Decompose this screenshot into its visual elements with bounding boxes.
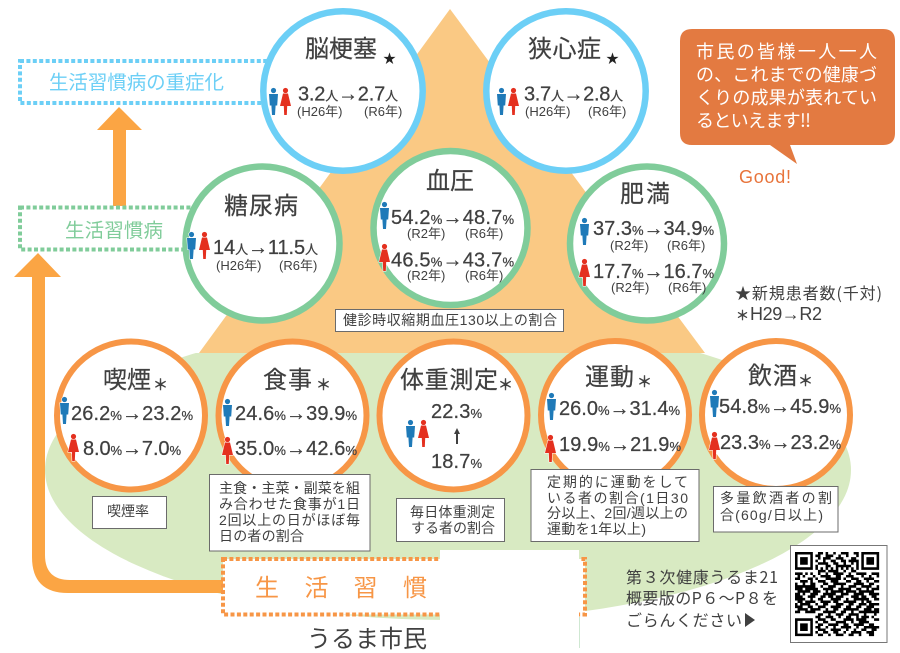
values: 14人→11.5人: [213, 237, 318, 259]
box: severe lifestyle disease: [20, 61, 270, 103]
note: diet definition: [210, 474, 370, 551]
note: exercise definition: いる者の割合(1日30: [547, 490, 688, 506]
values: men: 26.2%→23.2%: [71, 403, 193, 425]
values: 3.7人→2.8人: [524, 84, 623, 106]
icon: man: [710, 390, 719, 417]
years: men: (R6年): [667, 238, 705, 253]
note: smoking rate: 喫煙率: [107, 503, 149, 519]
asterisk: ＊: [798, 370, 813, 391]
values: 3.2人→2.7人: [298, 84, 398, 106]
circle: diabetes: [186, 166, 340, 320]
title: 運動: [585, 357, 634, 392]
years: men: (R2年): [610, 238, 648, 253]
asterisk: ＊: [637, 371, 652, 392]
note: blood pressure definition: 健診時収縮期血圧130以上の割合: [343, 312, 557, 328]
callout: message: [680, 29, 895, 164]
years: women: (R2年): [407, 268, 445, 283]
good label: Good!: [739, 167, 791, 187]
arrow: up: [454, 428, 460, 444]
circle: blood pressure: [374, 151, 528, 305]
values: men: 54.2%→48.7%: [391, 207, 514, 229]
icon: man: [547, 393, 556, 420]
years: (H26年): [297, 104, 343, 119]
title: 肥満: [620, 174, 670, 209]
note: drinking definition: 合(60g/日以上): [720, 507, 823, 523]
values: men: 54.8%→45.9%: [719, 396, 841, 418]
values: women: 23.3%→23.2%: [720, 432, 841, 454]
icon: woman: [418, 420, 429, 447]
label: lifestyle habits: 慣: [403, 568, 427, 603]
lifestyle base: green blob: [45, 353, 851, 620]
icon: man: [580, 218, 589, 245]
note: blood pressure definition: [336, 310, 564, 332]
values: women: 19.9%→21.9%: [559, 434, 681, 456]
note: diet definition: 2回以上の日がほぼ毎: [219, 512, 360, 528]
icon: woman: [222, 437, 233, 464]
arrow: lifestyle to lifestyle disease: [14, 253, 224, 593]
reference text: 第３次健康うるま21: [626, 564, 778, 588]
note: smoking rate: [92, 496, 166, 528]
note: drinking definition: 多量飲酒者の割: [720, 490, 832, 506]
label: lifestyle habits: 活: [304, 568, 328, 603]
note: weight definition: [396, 498, 504, 542]
label: Uruma citizens: うるま市民: [307, 619, 427, 653]
circle: cerebral infarction: [263, 11, 423, 171]
icon: woman: [280, 88, 291, 115]
callout text: の、これまでの健康づ: [696, 61, 877, 87]
icon: woman: [579, 259, 590, 286]
callout text: 市民の皆様一人一人: [696, 38, 877, 64]
icon: woman: [68, 434, 79, 461]
years: women: (R6年): [668, 280, 706, 295]
legend: ★新規患者数(千対): [735, 280, 882, 304]
title: 飲酒: [748, 356, 797, 391]
callout text: るといえます!!: [696, 107, 811, 133]
title: 脳梗塞: [305, 29, 377, 64]
years: (H26年): [525, 104, 571, 119]
title: 喫煙: [103, 360, 151, 395]
title: 血圧: [426, 161, 474, 196]
pyramid: orange triangle background: [199, 9, 705, 353]
icon: pointer triangle: [745, 613, 755, 627]
asterisk: ＊: [316, 374, 331, 395]
icon: man: [497, 88, 506, 115]
arrow: lifestyle disease to severe: [97, 107, 142, 206]
values: women: 17.7%→16.7%: [593, 261, 714, 283]
note: diet definition: 日の者の割合: [219, 528, 304, 544]
years: men: (R2年): [407, 226, 445, 241]
values: men: 26.0%→31.4%: [559, 398, 680, 420]
note: exercise definition: 分以上、2回/週以上の: [547, 505, 688, 521]
icon: woman: [379, 244, 390, 271]
reference text: ごらんください: [626, 607, 742, 631]
note: weight definition: 毎日体重測定: [410, 504, 495, 520]
icon: woman: [709, 432, 720, 459]
circle: diet: [218, 342, 366, 490]
values: men: 37.3%→34.9%: [593, 218, 714, 240]
reference text: 概要版のP６～P８を: [626, 585, 778, 609]
asterisk: ＊: [498, 374, 513, 395]
circle: smoking: [57, 342, 205, 490]
icon: woman: [545, 435, 556, 462]
asterisk: ＊: [153, 374, 168, 395]
years: men: (R6年): [465, 226, 503, 241]
values: women: 35.0%→42.6%: [235, 438, 357, 460]
icon: man: [60, 397, 69, 424]
QR code: [790, 546, 887, 642]
circle: obesity: [570, 166, 724, 320]
icon: woman: [199, 232, 210, 259]
values: women: 8.0%→7.0%: [83, 438, 181, 460]
icon: man: [406, 420, 415, 447]
icon: woman: [508, 88, 519, 115]
label: lifestyle disease: 生活習慣病: [65, 214, 163, 243]
years: (R6年): [279, 258, 317, 273]
years: women: (R2年): [611, 280, 649, 295]
legend: asterisk: ＊: [736, 305, 749, 324]
label: lifestyle habits: 生: [255, 568, 279, 603]
years: (H26年): [216, 258, 262, 273]
values: men: 24.6%→39.9%: [235, 403, 357, 425]
box: lifestyle habits: [223, 559, 585, 614]
note: weight definition: する者の割合: [411, 520, 495, 536]
legend: period: H29→R2: [750, 304, 822, 324]
icon: man: [269, 88, 278, 115]
legend: [735, 280, 882, 324]
label: severe lifestyle disease: 生活習慣病の重症化: [49, 66, 224, 95]
years: (R6年): [364, 104, 402, 119]
circle: exercise: [541, 341, 689, 489]
note: exercise definition: 運動を1年以上): [547, 521, 646, 537]
title: 食事: [263, 360, 312, 395]
note: exercise definition: [531, 470, 699, 542]
title: 体重測定: [400, 360, 498, 395]
circle: angina: [486, 11, 646, 171]
label: lifestyle habits: 習: [354, 568, 378, 603]
callout text: くりの成果が表れてい: [696, 84, 877, 110]
star mark: ★: [383, 51, 396, 66]
value: R2: 18.7%: [431, 451, 482, 473]
icon: man: [187, 232, 196, 259]
icon: man: [223, 399, 232, 426]
star mark: ★: [606, 51, 619, 66]
years: (R6年): [588, 104, 626, 119]
note: drinking definition: [714, 486, 838, 532]
values: women: 46.5%→43.7%: [391, 250, 514, 272]
icon: man: [380, 202, 389, 229]
note: exercise definition: 定期的に運動をして: [547, 474, 688, 490]
box: lifestyle disease: [20, 208, 200, 250]
title: 狭心症: [528, 29, 601, 64]
title: 糖尿病: [224, 186, 298, 221]
circle: drinking: [702, 341, 850, 489]
value: R6: 22.3%: [431, 401, 482, 423]
note: diet definition: 主食・主菜・副菜を組: [219, 480, 360, 496]
circle: weight measurement: [380, 342, 528, 490]
note: diet definition: み合わせた食事が1日: [219, 496, 360, 512]
years: women: (R6年): [465, 268, 503, 283]
